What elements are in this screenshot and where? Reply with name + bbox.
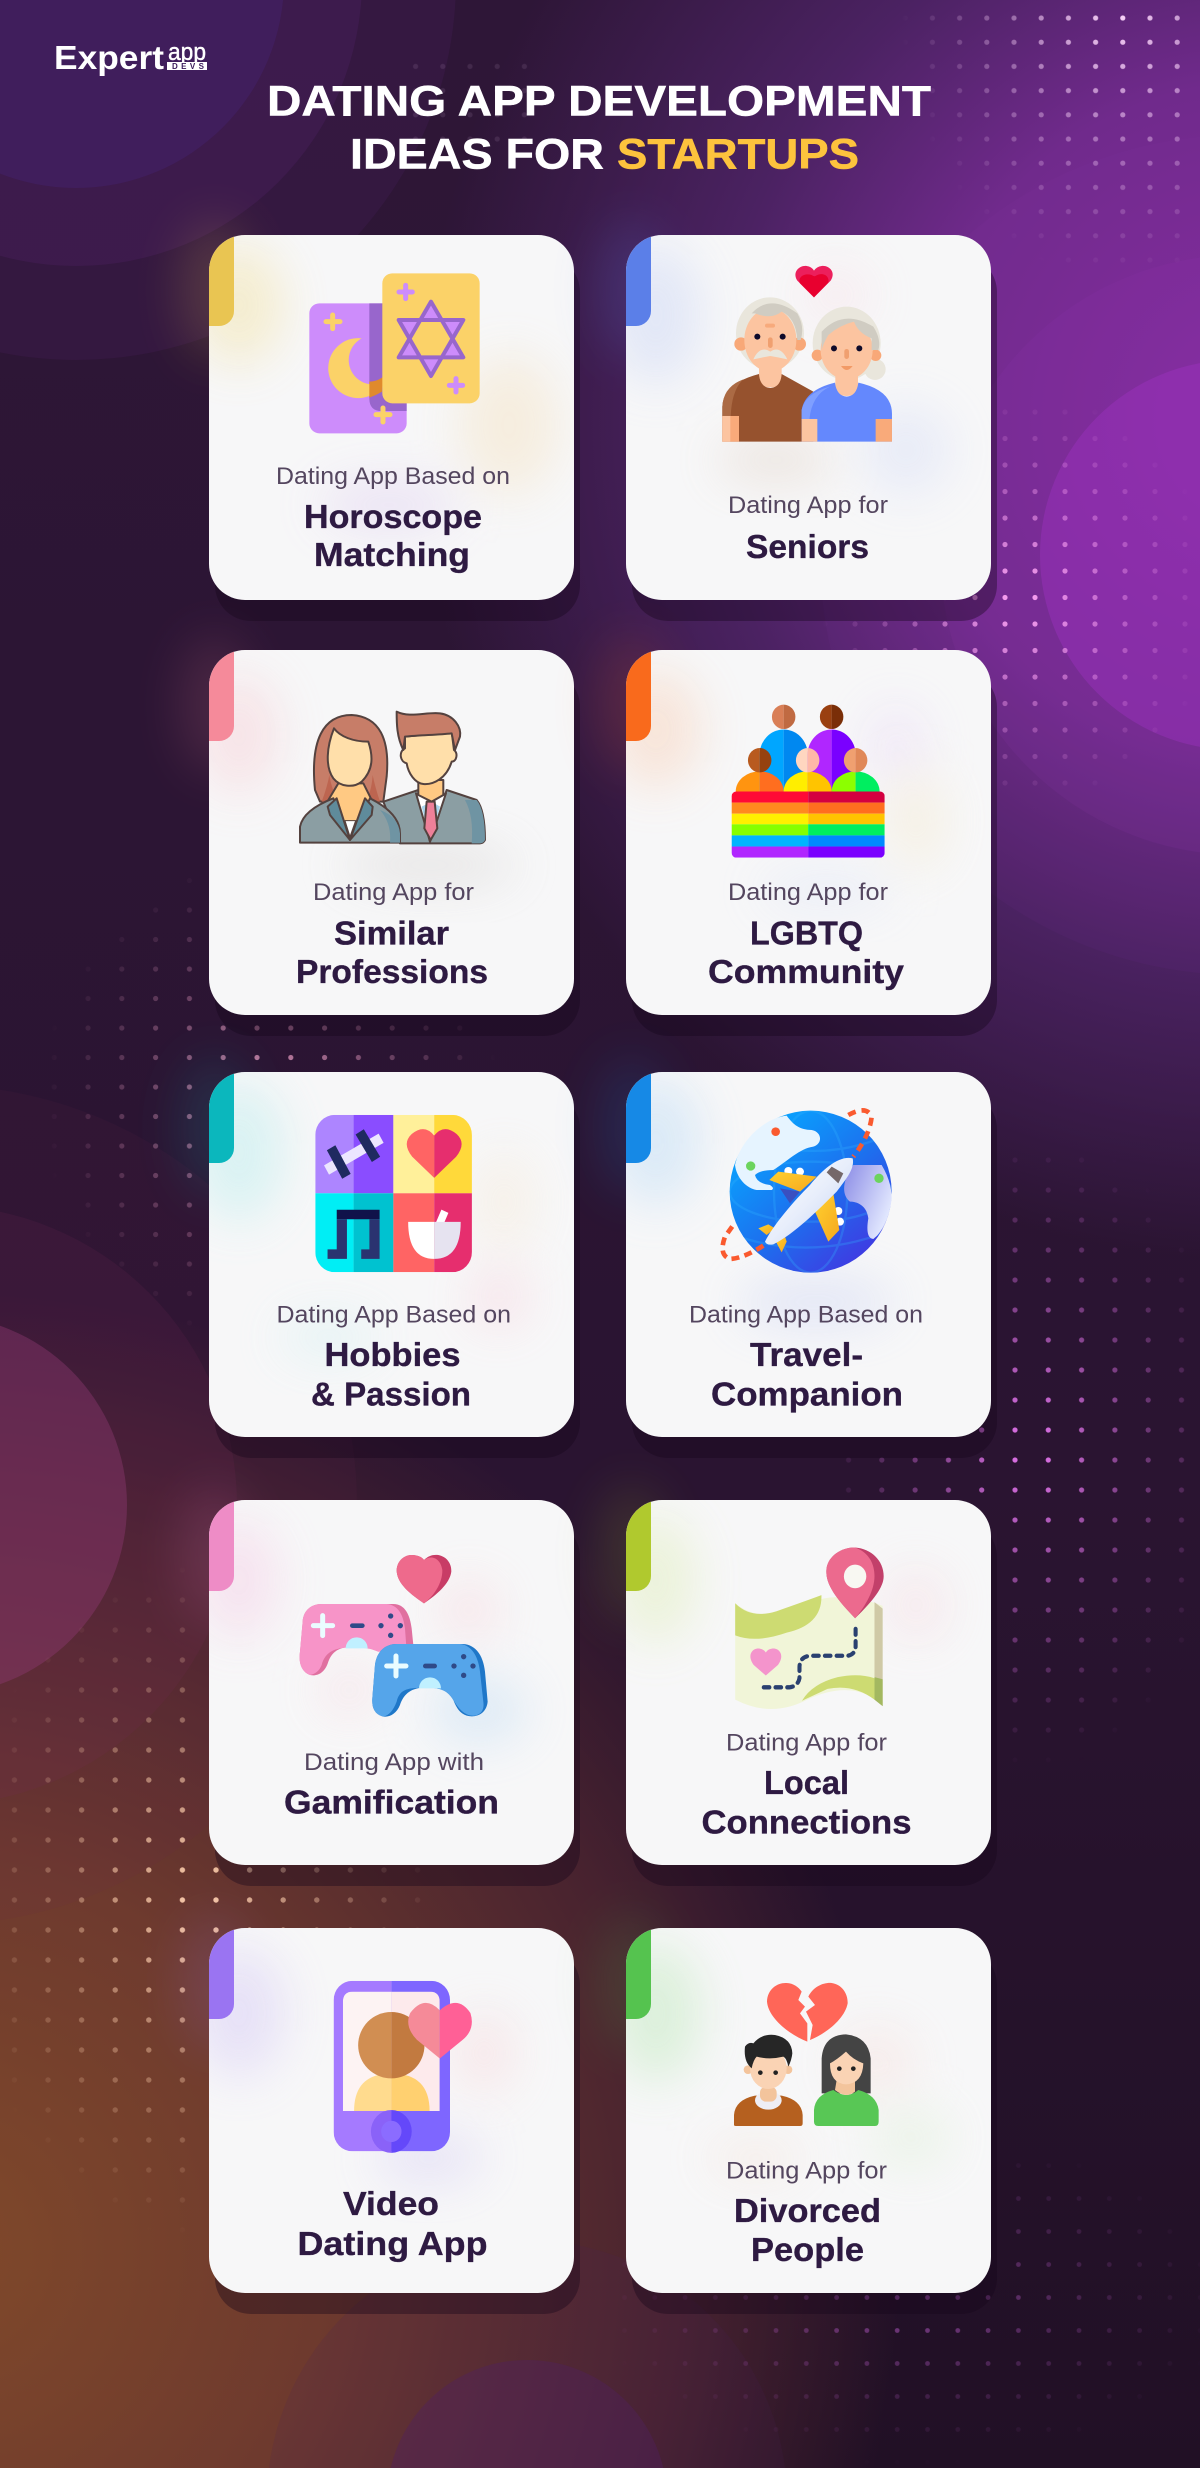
heading: Video — [343, 2185, 439, 2222]
heading — [702, 1764, 912, 1840]
subtitle: Dating App for — [728, 492, 888, 519]
logo: app — [168, 39, 206, 66]
heading: Connections — [702, 1804, 912, 1840]
subtitle: Dating App Based on — [276, 1301, 511, 1328]
icon: game controllers and heart — [300, 1555, 488, 1717]
icon: map with pin — [735, 1547, 884, 1709]
panel: Video Dating App — [180, 1913, 580, 2314]
panel: Local Connections — [597, 1485, 997, 1886]
heading — [734, 2192, 881, 2268]
icon: globe and airplane — [723, 1110, 892, 1273]
heading: Gamification — [284, 1784, 499, 1821]
heading: Hobbies — [324, 1336, 460, 1373]
icon: LGBTQ group with rainbow flag — [732, 705, 885, 858]
icon: hobbies grid — [315, 1115, 472, 1272]
title — [267, 78, 931, 178]
heading: Travel- — [750, 1336, 863, 1373]
panel: Horoscope Matching — [180, 220, 580, 621]
panel: Travel-Companion — [597, 1057, 997, 1458]
icon: senior couple — [722, 266, 892, 442]
subtitle: Dating App for — [726, 2158, 887, 2184]
heading: People — [751, 2231, 864, 2268]
heading — [304, 498, 482, 573]
heading: Community — [708, 953, 905, 990]
heading: Divorced — [734, 2192, 881, 2229]
heading: Seniors — [746, 528, 869, 565]
logo: DEVS — [172, 62, 205, 71]
subtitle: Dating App Based on — [276, 463, 510, 490]
icon: horoscope cards — [309, 273, 480, 433]
heading: & Passion — [311, 1376, 471, 1412]
subtitle: Dating App with — [304, 1749, 484, 1776]
title: IDEAS FOR — [350, 130, 604, 178]
heading — [296, 914, 488, 990]
panel: Divorced People — [597, 1913, 997, 2314]
subtitle: Dating App for — [726, 1730, 887, 1756]
panel: Similar Professions — [180, 635, 580, 1036]
logo: Expert — [54, 39, 164, 76]
panel: LGBTQ Community — [597, 635, 997, 1036]
logo — [54, 39, 207, 76]
heading: Companion — [711, 1376, 903, 1412]
panel: Seniors — [597, 220, 997, 621]
heading: LGBTQ — [750, 914, 863, 952]
icon: broken heart and couple — [734, 1983, 879, 2126]
heading: Matching — [314, 536, 470, 573]
heading: Horoscope — [304, 498, 482, 535]
panel: Gamification — [180, 1485, 580, 1886]
subtitle: Dating App Based on — [689, 1301, 923, 1328]
heading: Dating App — [298, 2225, 488, 2262]
icon: phone with video call — [334, 1981, 472, 2153]
panel: Hobbies & Passion — [180, 1057, 580, 1458]
subtitle: Dating App for — [728, 879, 888, 906]
heading — [711, 1336, 903, 1412]
title: STARTUPS — [617, 130, 859, 178]
title: DATING APP DEVELOPMENT — [267, 78, 931, 126]
heading: Local — [764, 1764, 849, 1801]
heading — [298, 2185, 488, 2262]
icon: professional man and woman — [300, 712, 485, 843]
heading: Similar — [334, 914, 449, 952]
heading: Professions — [296, 953, 488, 990]
subtitle: Dating App for — [313, 879, 474, 906]
heading — [708, 914, 905, 990]
heading — [311, 1336, 471, 1412]
